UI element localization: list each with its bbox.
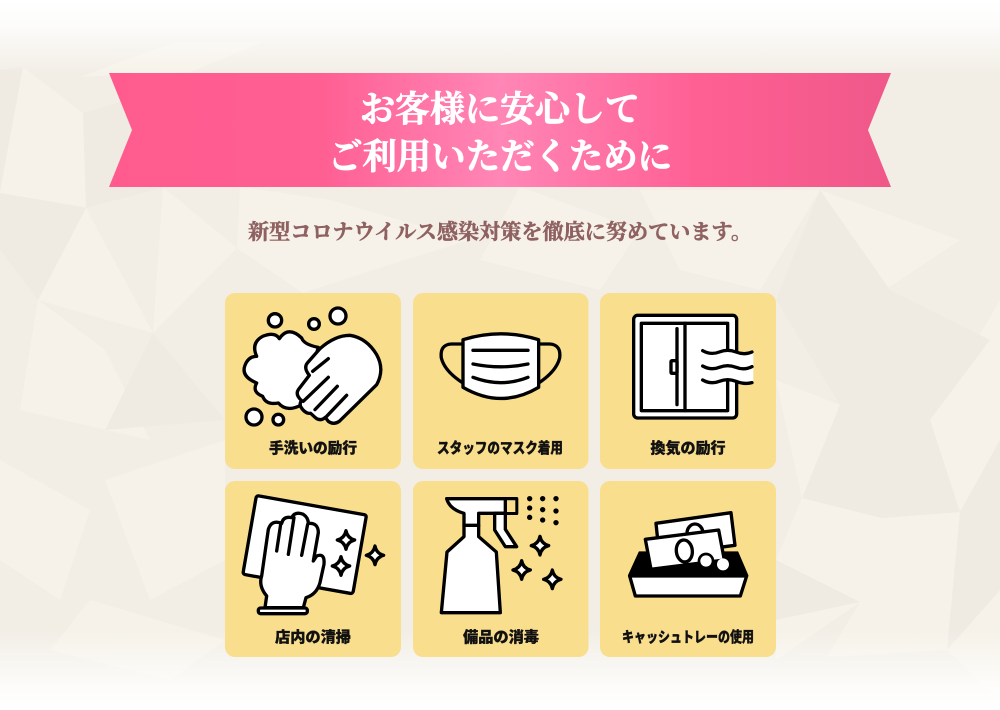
label: 備品の消毒 (463, 628, 539, 646)
icon: washing hands with foam (244, 308, 381, 425)
icon: cash tray with bills and coins (629, 513, 748, 596)
icon: spray bottle (441, 496, 561, 613)
icon: face mask (441, 334, 560, 398)
label: キャッシュトレーの使用 (622, 628, 754, 646)
icon: gloved hand wiping (243, 496, 384, 614)
panel: disinfecting equipment (413, 481, 588, 657)
panel: store cleaning (225, 481, 401, 657)
panel: hand washing (225, 293, 401, 469)
panel: staff masks (413, 293, 588, 469)
panel: cash tray (600, 481, 776, 657)
label: 換気の励行 (650, 439, 726, 457)
title line 2: ご利用いただくために (328, 136, 672, 176)
panel: ventilation (600, 293, 776, 469)
subtitle: 新型コロナウイルス感染対策を徹底に努めています。 (248, 220, 752, 244)
title line 1: お客様に安心して (360, 89, 640, 129)
banner ribbon with title (109, 73, 891, 187)
label: 手洗いの励行 (269, 439, 357, 457)
label: スタッフのマスク着用 (437, 439, 563, 457)
label: 店内の清掃 (275, 628, 351, 646)
icon: window with wind (634, 315, 753, 418)
